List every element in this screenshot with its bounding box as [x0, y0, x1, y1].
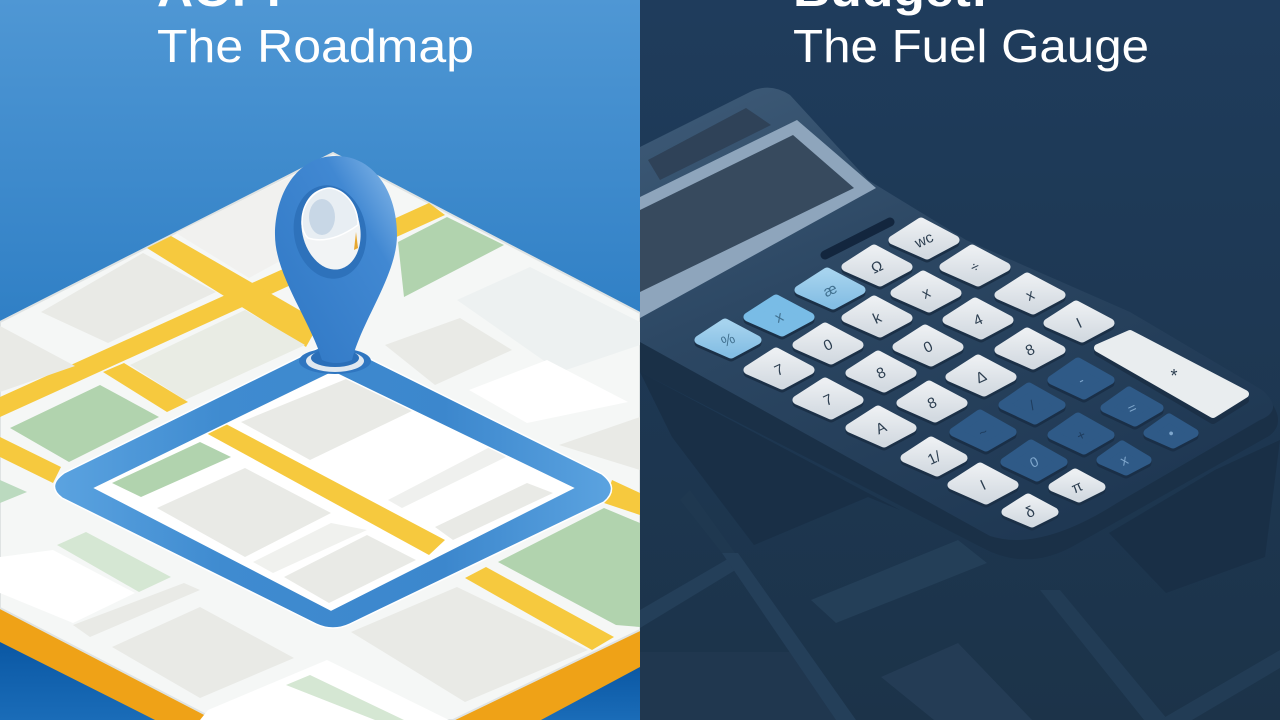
keypad: white keys: 4: [971, 311, 986, 330]
keypad: dark blue keys: +: [1074, 426, 1088, 444]
keypad: dark blue keys: ~: [976, 423, 990, 441]
keypad: white keys: A: [873, 419, 889, 438]
keypad: top keys: æ: [821, 280, 840, 301]
panel: AOP roadmap: [0, 0, 640, 720]
map blocks: [0, 175, 640, 720]
subheading: The Fuel Gauge: The Fuel Gauge: [793, 20, 1149, 72]
keypad: dark blue keys: 0: [1027, 453, 1041, 471]
background street grid: [640, 372, 1280, 720]
keypad: white keys: x: [919, 284, 934, 303]
keypad: white keys: I: [1074, 315, 1085, 332]
calculator body: [640, 340, 1278, 559]
keypad: white keys: 0: [921, 338, 936, 357]
roads: [0, 203, 640, 650]
bottom corners: [0, 640, 640, 720]
calculator: [640, 88, 1278, 559]
keypad: white keys: ÷: [968, 258, 983, 277]
solar panel: [648, 108, 771, 180]
panel: Budget fuel gauge: [640, 0, 1280, 720]
keypad: dark blue keys: x: [1117, 451, 1131, 469]
keypad: dark blue keys: •: [1165, 425, 1177, 441]
big equals key: *: [1170, 366, 1178, 386]
keypad: white keys: 8: [925, 394, 940, 413]
keypad: white keys: 7: [821, 391, 836, 410]
speaker slot: [825, 222, 890, 255]
keypad: dark blue keys: =: [1125, 399, 1139, 417]
keypad: dark blue keys: /: [1027, 397, 1037, 413]
keypad: top keys: [699, 222, 955, 357]
green parks: [0, 217, 640, 720]
keypad: white keys: I: [978, 477, 989, 494]
keypad: dark blue keys: -: [1076, 372, 1087, 388]
keypad: white keys: x: [1023, 286, 1038, 305]
keypad: white keys: 8: [1023, 341, 1038, 360]
big equals key: [1098, 334, 1245, 420]
keypad: top keys: Ω: [869, 257, 886, 278]
keypad: white keys: k: [870, 309, 885, 328]
keypad: dark blue keys: [954, 362, 1194, 480]
isometric map: [0, 153, 640, 720]
keypad: top keys: wc: [911, 229, 937, 252]
subheading: The Roadmap: The Roadmap: [157, 20, 474, 72]
keypad: white keys: 1/: [925, 448, 944, 469]
keypad: white keys: π: [1069, 478, 1085, 497]
map surface: [0, 153, 640, 720]
keypad: white keys: 0: [821, 336, 836, 355]
location pin: [275, 156, 397, 374]
keypad: white keys: 8: [874, 364, 889, 383]
map orange base: [0, 606, 640, 720]
keypad: white keys: Δ: [973, 368, 989, 387]
keypad: white keys: [748, 249, 1110, 526]
blue route ring: [54, 344, 612, 628]
display screen: [640, 135, 854, 292]
keypad: top keys: x: [772, 308, 787, 327]
keypad: top keys: %: [719, 330, 738, 351]
display frame: [640, 120, 876, 318]
keypad: white keys: δ: [1023, 503, 1038, 522]
keypad: white keys: 7: [772, 361, 787, 380]
blocks inside the route: [112, 377, 553, 603]
